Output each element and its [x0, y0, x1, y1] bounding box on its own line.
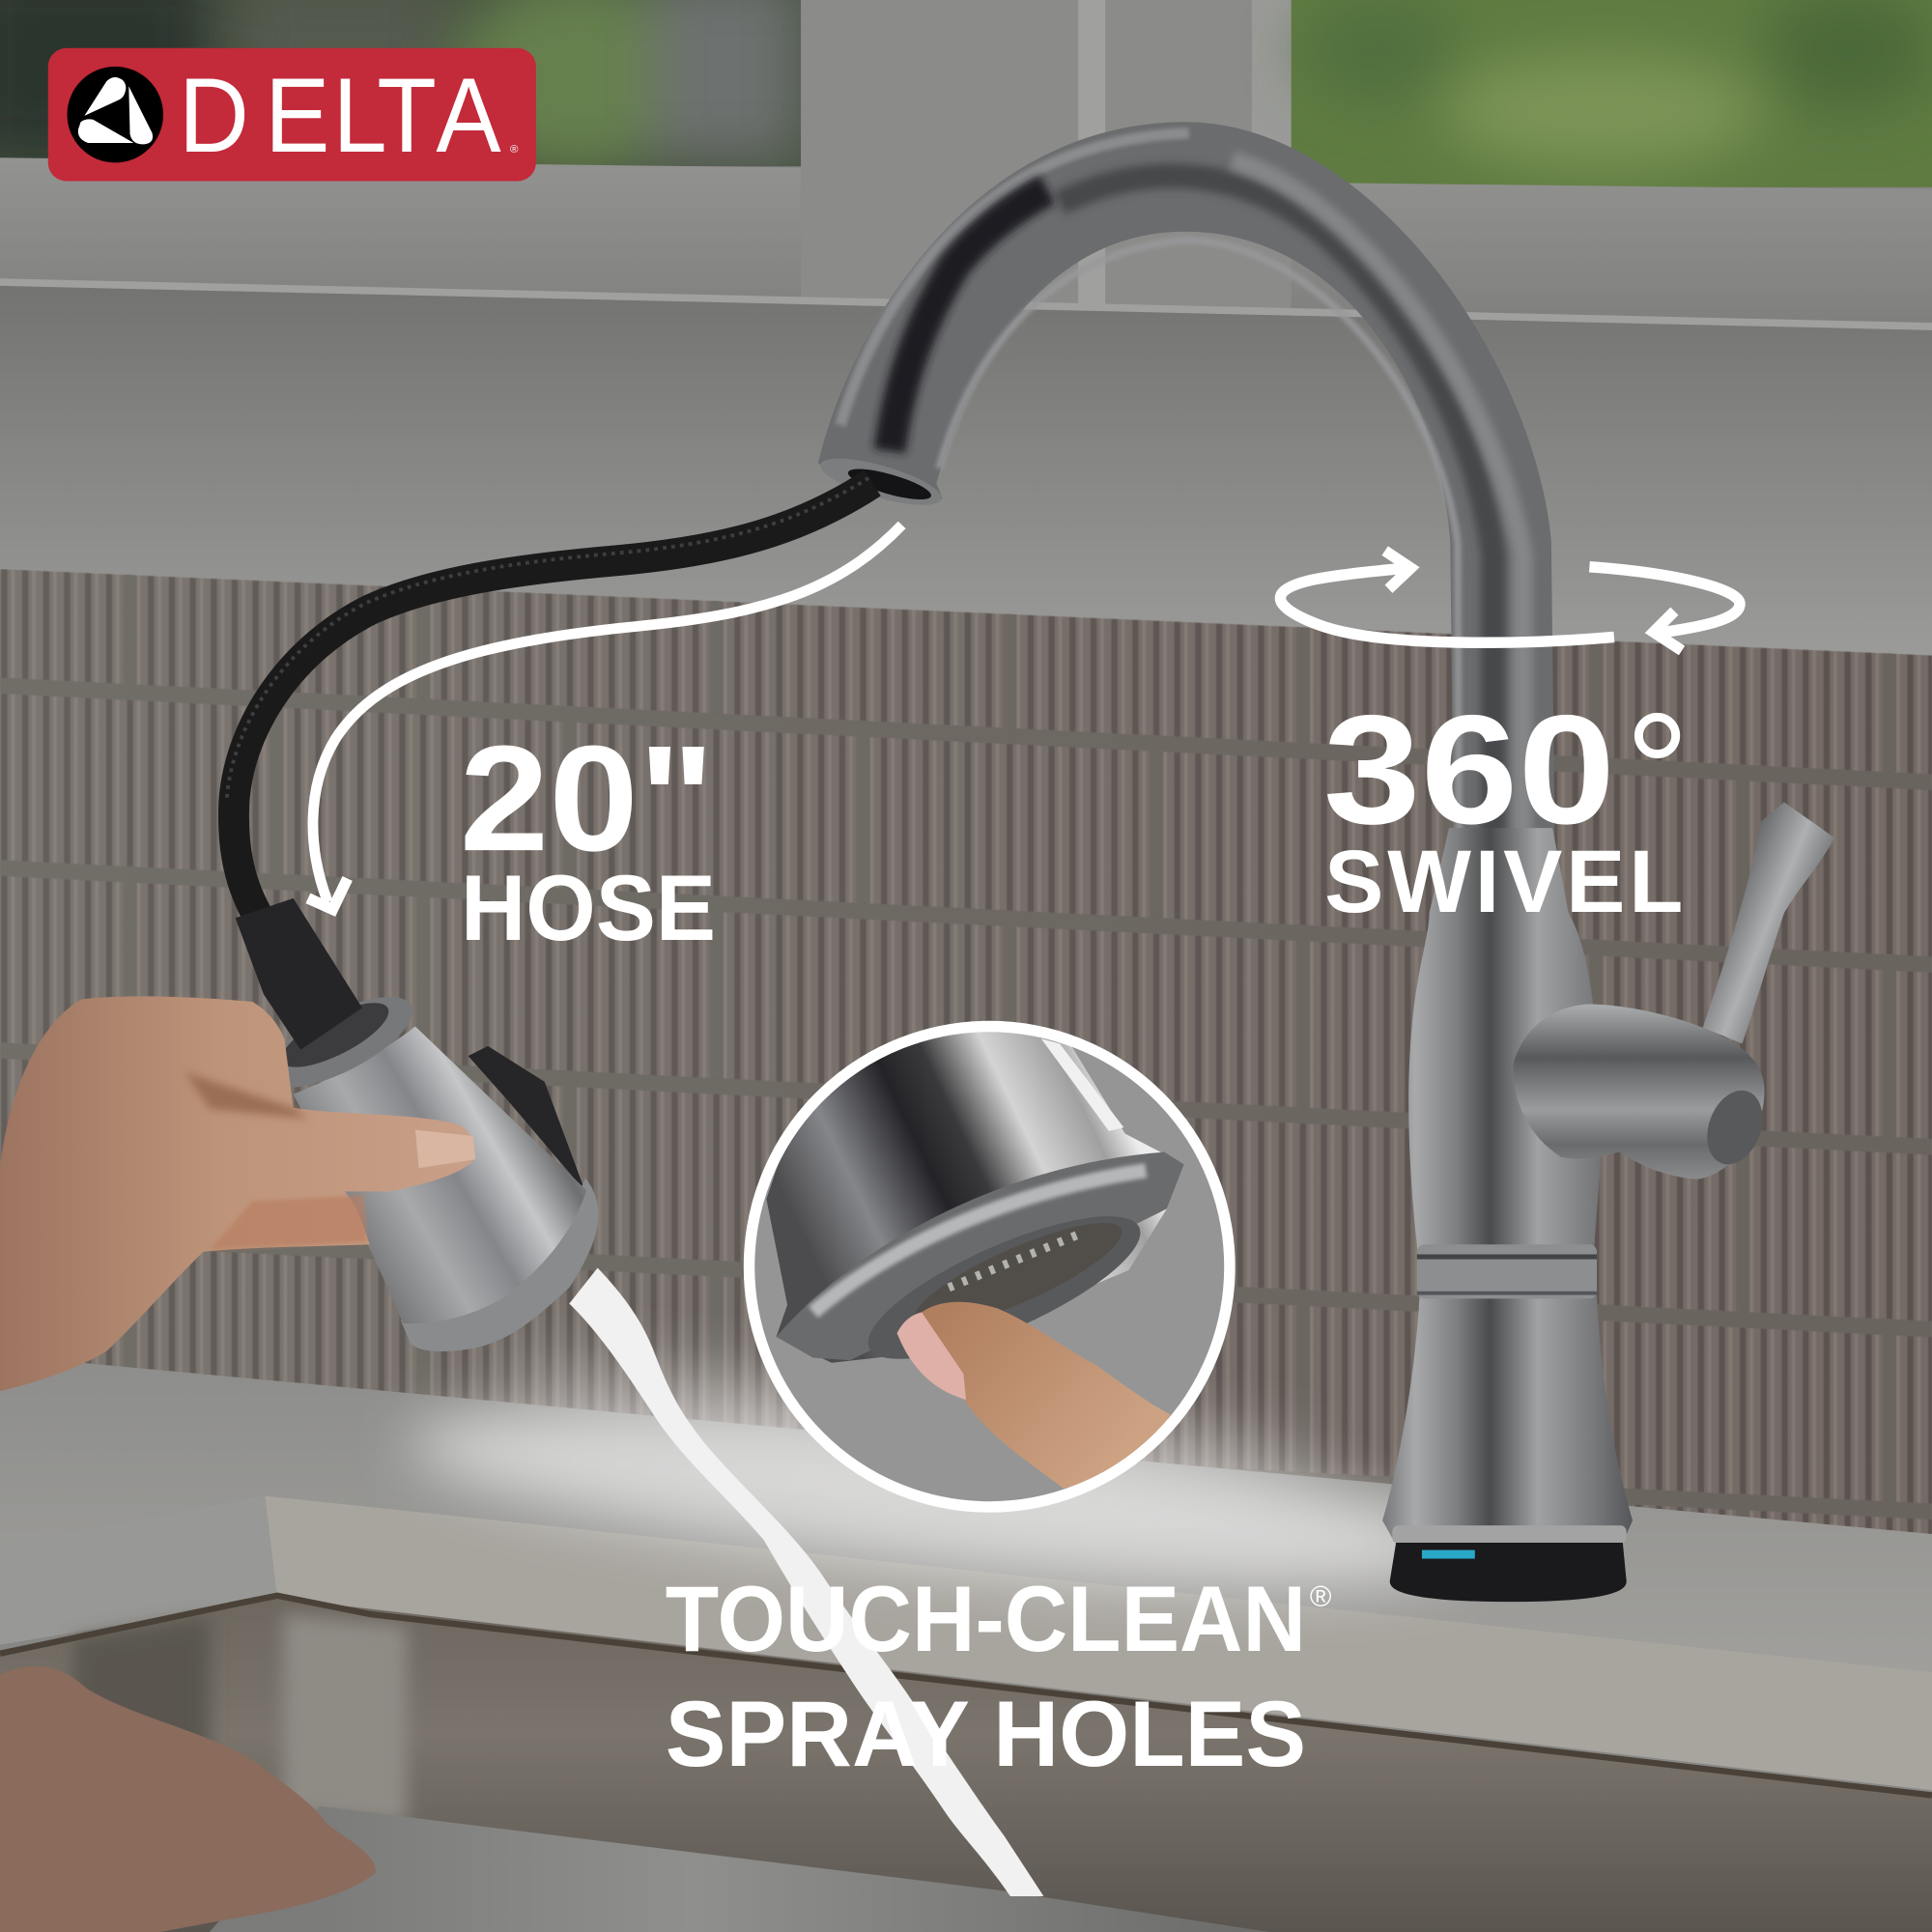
handle lever	[1703, 802, 1834, 1043]
right window view	[1292, 0, 1932, 187]
bottom rim	[401, 1178, 598, 1351]
holding hand	[0, 996, 475, 1391]
sink basin	[0, 1596, 1932, 1932]
label: touch-clean spray holes: SPRAY HOLES	[666, 1681, 1306, 1786]
lower left hand	[0, 1666, 376, 1932]
wall	[0, 281, 1932, 666]
arrows: swivel rotation	[1280, 551, 1740, 650]
pressing finger	[922, 1302, 1171, 1489]
foreground sink edge	[210, 1806, 1269, 1932]
faucet base body	[1382, 828, 1633, 1544]
label: 360 degree swivel: SWIVEL	[1324, 833, 1683, 931]
counter front face	[0, 1495, 1932, 1790]
window frame	[801, 0, 1293, 314]
gooseneck spout	[816, 122, 1555, 863]
sprayer body	[294, 1026, 586, 1323]
hose	[227, 478, 872, 922]
label: 360 degree swivel	[1323, 684, 1683, 931]
spray head close-up	[766, 1005, 1184, 1363]
label: touch-clean spray holes: ®	[1310, 1580, 1332, 1613]
counter light glow	[403, 1336, 1470, 1620]
faucet	[816, 122, 1834, 1602]
label: touch-clean spray holes: TOUCH-CLEAN	[666, 1566, 1306, 1671]
label: 360 degree swivel: 360	[1323, 684, 1615, 857]
wordmark: DELTA	[179, 57, 501, 175]
fingernail	[897, 1312, 966, 1400]
spray buttons	[469, 1046, 585, 1191]
label: 20 inch hose: HOSE	[461, 855, 716, 960]
black base with blue indicator	[1390, 1543, 1627, 1602]
callout: touch-clean inset	[750, 1005, 1230, 1507]
logo mark	[68, 67, 163, 162]
label: touch-clean spray holes	[666, 1566, 1332, 1786]
left window view	[0, 0, 801, 173]
label: 20 inch hose	[460, 714, 716, 960]
logo: Delta	[48, 48, 536, 181]
handle hub	[1513, 1005, 1773, 1179]
spray head rim	[777, 1152, 1184, 1360]
water stream	[569, 1267, 1043, 1896]
logo: Delta: ®	[510, 144, 519, 156]
spray holes	[867, 1216, 1140, 1359]
arrow: hose length	[308, 525, 902, 909]
hose connector	[236, 898, 362, 1050]
countertop surface	[0, 1355, 1932, 1672]
label: 20 inch hose: 20"	[460, 714, 715, 882]
bright edge streak	[1041, 1038, 1123, 1131]
tile backsplash	[0, 569, 1932, 1540]
sprayer head	[253, 980, 598, 1351]
top rim	[253, 980, 425, 1106]
window sills	[0, 157, 801, 308]
